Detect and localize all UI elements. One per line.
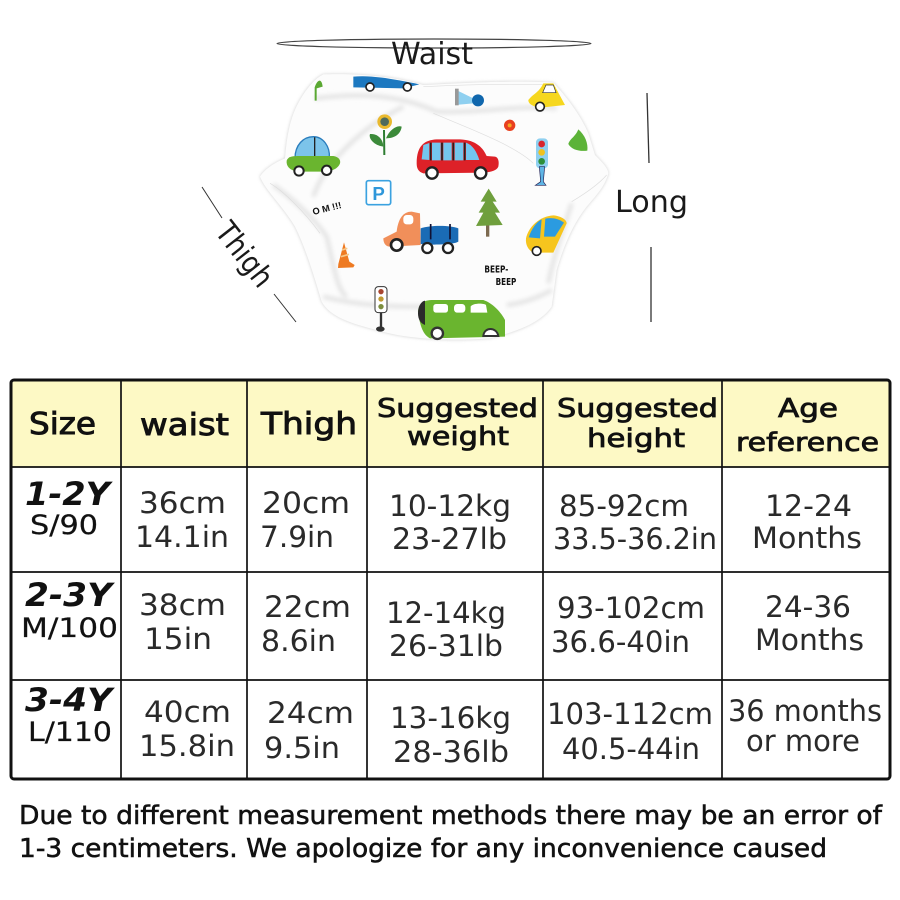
row: 3-4Y: 15.8in	[139, 729, 235, 763]
row: 1-2Y: 7.9in	[260, 520, 334, 554]
elastic seams	[270, 84, 607, 233]
row: 3-4Y: 3-4Y	[25, 681, 115, 719]
header row: waist	[140, 408, 229, 443]
table header background	[11, 380, 890, 467]
icon: waist measuring loop	[277, 39, 591, 48]
print: parking sign: P	[372, 183, 385, 204]
disclaimer note	[19, 801, 883, 864]
row: 2-3Y: 2-3Y	[25, 576, 115, 614]
header row: Thigh	[260, 407, 357, 442]
print: green fragment top left	[315, 81, 323, 101]
print: BEEP BEEP text: BEEP	[496, 277, 516, 288]
row: 2-3Y: M/100	[21, 613, 118, 644]
print: sunflower	[370, 114, 402, 155]
print: green bus	[418, 300, 505, 339]
size table	[11, 380, 890, 779]
print: green fragment right	[568, 129, 588, 151]
print: horn	[455, 89, 484, 106]
row: 3-4Y: 40.5-44in	[562, 732, 700, 766]
row: 3-4Y: or more	[746, 724, 860, 758]
arrow: length measure lower line	[650, 247, 652, 322]
row: 2-3Y: Months	[755, 623, 864, 657]
row: 3-4Y: 28-36lb	[393, 735, 509, 769]
print: BEEP BEEP text: BEEP-	[484, 264, 508, 275]
row: 1-2Y	[25, 475, 862, 556]
garment soft edge	[260, 74, 608, 340]
row: 1-2Y: 20cm	[262, 486, 350, 520]
label: Waist: Waist	[391, 37, 473, 72]
print: yellow car top right	[528, 83, 565, 111]
row: 2-3Y: 38cm	[139, 588, 226, 622]
row: 2-3Y	[21, 576, 864, 663]
header row: Suggested	[557, 394, 718, 424]
row: 1-2Y: Months	[752, 521, 862, 555]
header row: height	[587, 424, 685, 454]
print: small traffic light	[375, 287, 387, 332]
row: 3-4Y: 40cm	[144, 695, 231, 729]
row: 1-2Y: 36cm	[139, 486, 226, 520]
row: 2-3Y: 36.6-40in	[551, 625, 690, 659]
print: red bus	[417, 139, 499, 179]
header row: Size	[29, 407, 96, 442]
row: 1-2Y: 14.1in	[135, 520, 229, 554]
product photo: training pants	[260, 74, 608, 340]
table grid	[11, 380, 890, 779]
print: traffic cone	[338, 242, 355, 268]
row: 3-4Y: 24cm	[267, 696, 354, 730]
row: 2-3Y: 22cm	[264, 590, 351, 624]
print: parking sign	[366, 181, 391, 205]
print: red flower	[504, 120, 515, 131]
row: 2-3Y: 26-31lb	[389, 629, 503, 663]
row: 3-4Y: 13-16kg	[390, 701, 511, 735]
row: 3-4Y: 36 months	[728, 694, 882, 728]
header row: reference	[736, 428, 879, 458]
header row: Suggested	[377, 394, 538, 424]
header row: weight	[407, 422, 509, 452]
disclaimer note: Due to different measurement methods there may be an error of	[19, 801, 883, 831]
row: 2-3Y: 93-102cm	[557, 591, 705, 625]
fabric shading	[273, 95, 572, 307]
label: Long: Long	[615, 185, 688, 220]
arrow: length measure upper line	[647, 93, 649, 163]
header row: Age	[778, 394, 838, 424]
print: blue car top	[353, 76, 419, 91]
row: 2-3Y: 8.6in	[261, 624, 336, 658]
row: 2-3Y: 12-14kg	[386, 596, 506, 630]
row: 1-2Y: S/90	[30, 510, 98, 541]
header row	[29, 394, 879, 458]
row: 2-3Y: 15in	[144, 622, 212, 656]
row: 1-2Y: 33.5-36.2in	[553, 522, 717, 556]
row: 1-2Y: 10-12kg	[389, 489, 511, 523]
print: traffic light	[535, 138, 548, 185]
print: green car left	[287, 137, 340, 176]
row: 1-2Y: 85-92cm	[559, 489, 689, 523]
label: Thigh: Thigh	[207, 215, 280, 294]
print: pine tree	[476, 189, 503, 237]
row: 3-4Y	[25, 681, 882, 769]
row: 3-4Y: L/110	[28, 717, 112, 748]
row: 1-2Y: 1-2Y	[25, 475, 113, 513]
print: orange truck	[383, 212, 458, 253]
row: 1-2Y: 12-24	[765, 489, 852, 523]
row: 3-4Y: 103-112cm	[547, 697, 713, 731]
print: BEEP BEEP text	[484, 264, 516, 288]
row: 1-2Y: 23-27lb	[392, 522, 507, 556]
disclaimer note: 1-3 centimeters. We apologize for any inconvenience caused	[19, 834, 827, 864]
arrow: thigh measure lower line	[274, 294, 296, 322]
print: yellow car right	[526, 215, 567, 255]
print: OM text: O M !!!	[311, 200, 342, 217]
row: 2-3Y: 24-36	[765, 590, 851, 624]
row: 3-4Y: 9.5in	[264, 731, 340, 765]
arrow: thigh measure upper line	[202, 187, 222, 218]
garment body	[260, 74, 608, 340]
